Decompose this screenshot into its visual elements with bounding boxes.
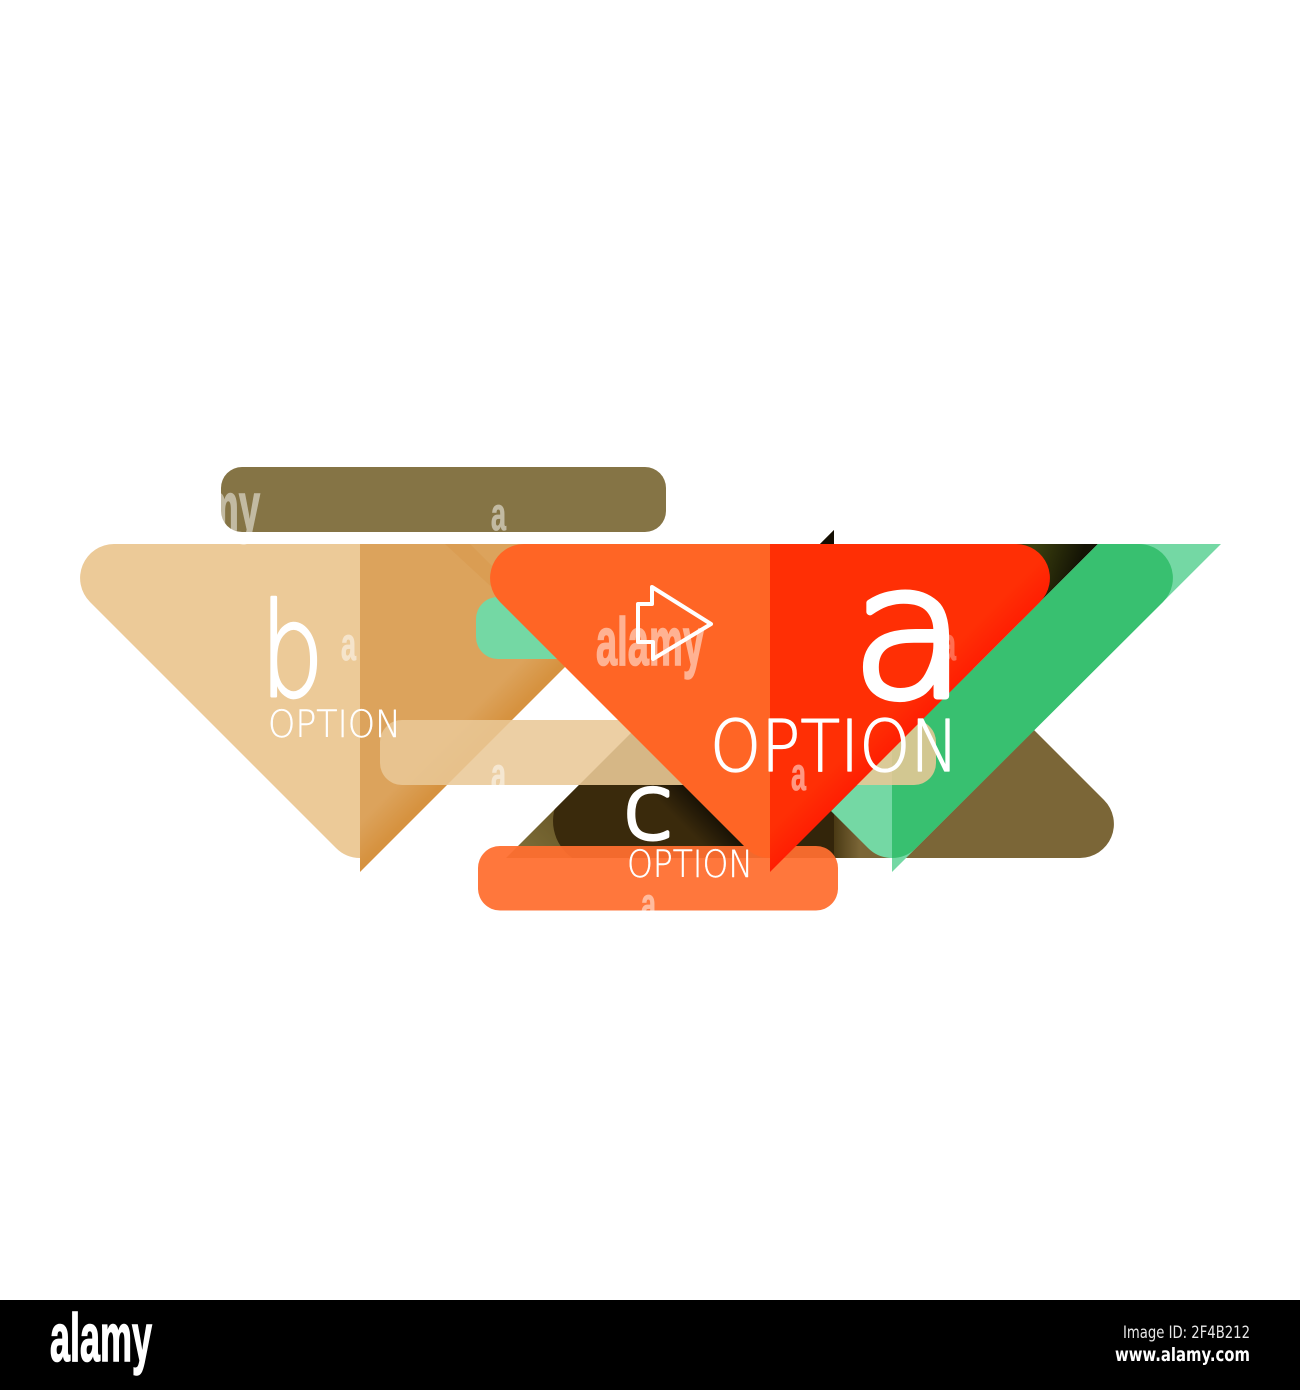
website: www.alamy.com	[1115, 1344, 1250, 1366]
watermarks: a	[641, 878, 656, 930]
panel: option c triangle	[506, 530, 1114, 866]
orange left half	[490, 544, 770, 858]
footer logo: alamy	[50, 1300, 152, 1376]
footer bar	[0, 1300, 1300, 1390]
dark corner behind orange triangle	[1000, 544, 1098, 622]
watermarks: a	[491, 748, 506, 800]
panel: option b triangle	[80, 544, 688, 872]
lighter left half	[80, 544, 360, 858]
option a label: OPTION	[710, 705, 959, 788]
image id: Image ID: 2F4B212	[1123, 1323, 1250, 1343]
watermarks: a	[491, 488, 506, 540]
watermarks: a	[341, 618, 356, 670]
option c label: OPTION	[627, 843, 753, 886]
darker green band	[892, 544, 1173, 858]
watermarks: a	[791, 748, 806, 800]
panel: option a orange triangle	[490, 544, 1050, 872]
icon: outlined arrow	[638, 587, 711, 659]
watermarks	[152, 469, 956, 930]
translucent middle tan bar	[380, 720, 936, 785]
orange bottom bar	[478, 846, 838, 910]
dark rounded bar	[553, 785, 834, 856]
watermarks: alamy	[596, 604, 704, 680]
darker right half	[360, 544, 688, 872]
soft shadow diagonal	[445, 544, 530, 604]
right half of olive triangle	[834, 544, 1114, 858]
letter a: a	[851, 526, 967, 740]
watermarks: alamy	[152, 469, 260, 545]
strip beside green	[834, 800, 860, 858]
green bar behind orange triangle	[476, 597, 716, 659]
watermarks: a	[941, 618, 956, 670]
letter b: b	[260, 575, 324, 727]
top olive bar	[221, 467, 666, 532]
letter c: c	[623, 755, 673, 860]
red right half	[770, 544, 1050, 872]
left half of olive triangle	[506, 530, 834, 858]
light green sharp layer	[831, 544, 1221, 872]
panel: green triangle	[831, 544, 1221, 872]
option b label: OPTION	[268, 703, 401, 746]
black tip	[816, 530, 834, 548]
